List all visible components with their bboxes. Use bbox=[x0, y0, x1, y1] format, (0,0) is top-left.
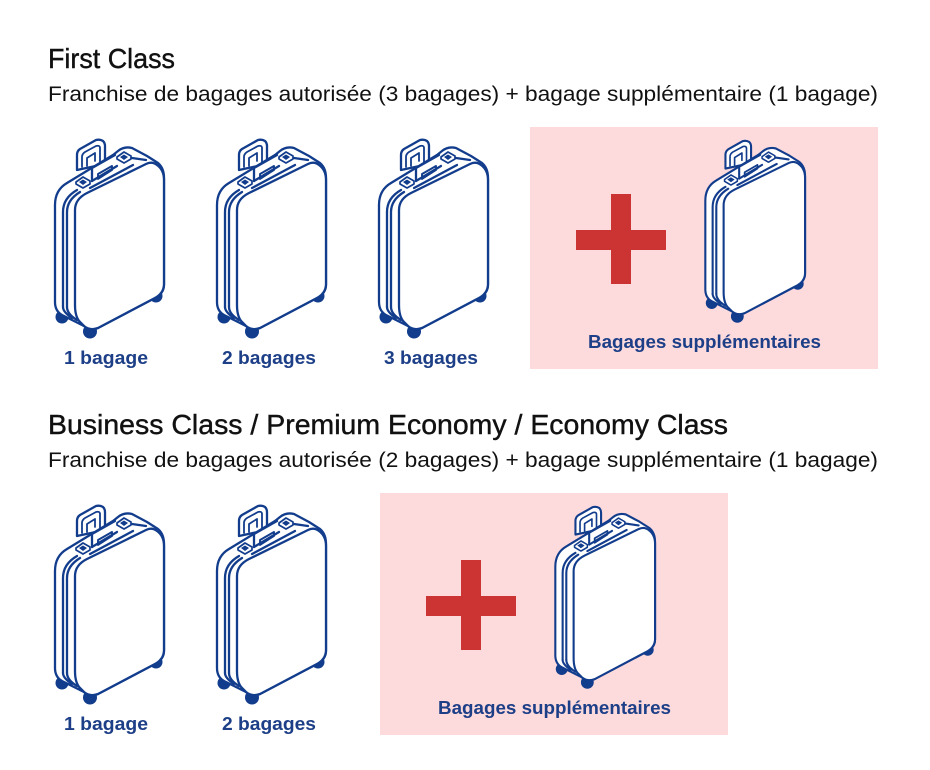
icon: suitcase 1 bbox=[55, 140, 164, 338]
panel: extra baggage bbox=[380, 493, 728, 735]
panel: First Class section bbox=[48, 43, 878, 369]
label: Bagages supplémentaires: Bagages supplémentaires bbox=[588, 331, 821, 352]
icon: suitcase 3 bbox=[379, 140, 488, 338]
label: 1 bagage: 1 bagage bbox=[64, 713, 148, 734]
text: First Class allowance: Franchise de bagages autorisée (3 bagages) + bagage supplémentaire (1 bagage) bbox=[48, 82, 878, 106]
panel: Business / Premium Economy / Economy section bbox=[48, 409, 878, 735]
label: 3 bagages: 3 bagages bbox=[384, 347, 478, 368]
icon: red plus bbox=[576, 194, 666, 284]
icon: extra suitcase bbox=[555, 507, 655, 689]
panel: extra baggage bbox=[530, 127, 878, 369]
text: Business and Economy allowance: Franchise de bagages autorisée (2 bagages) + bagage supplémentaire (1 bagage) bbox=[48, 448, 878, 472]
icon: suitcase 2 bbox=[217, 140, 326, 338]
icon: suitcase 2 bbox=[217, 506, 326, 704]
icon: extra suitcase bbox=[705, 141, 805, 323]
heading: Business Class / Premium Economy / Economy Class: Business Class / Premium Economy / Economy Class bbox=[48, 409, 728, 440]
label: Bagages supplémentaires: Bagages supplémentaires bbox=[438, 697, 671, 718]
icon: suitcase 1 bbox=[55, 506, 164, 704]
label: 2 bagages: 2 bagages bbox=[222, 713, 316, 734]
label: 1 bagage: 1 bagage bbox=[64, 347, 148, 368]
heading: First Class: First Class bbox=[48, 43, 175, 74]
label: 2 bagages: 2 bagages bbox=[222, 347, 316, 368]
icon: red plus bbox=[426, 560, 516, 650]
